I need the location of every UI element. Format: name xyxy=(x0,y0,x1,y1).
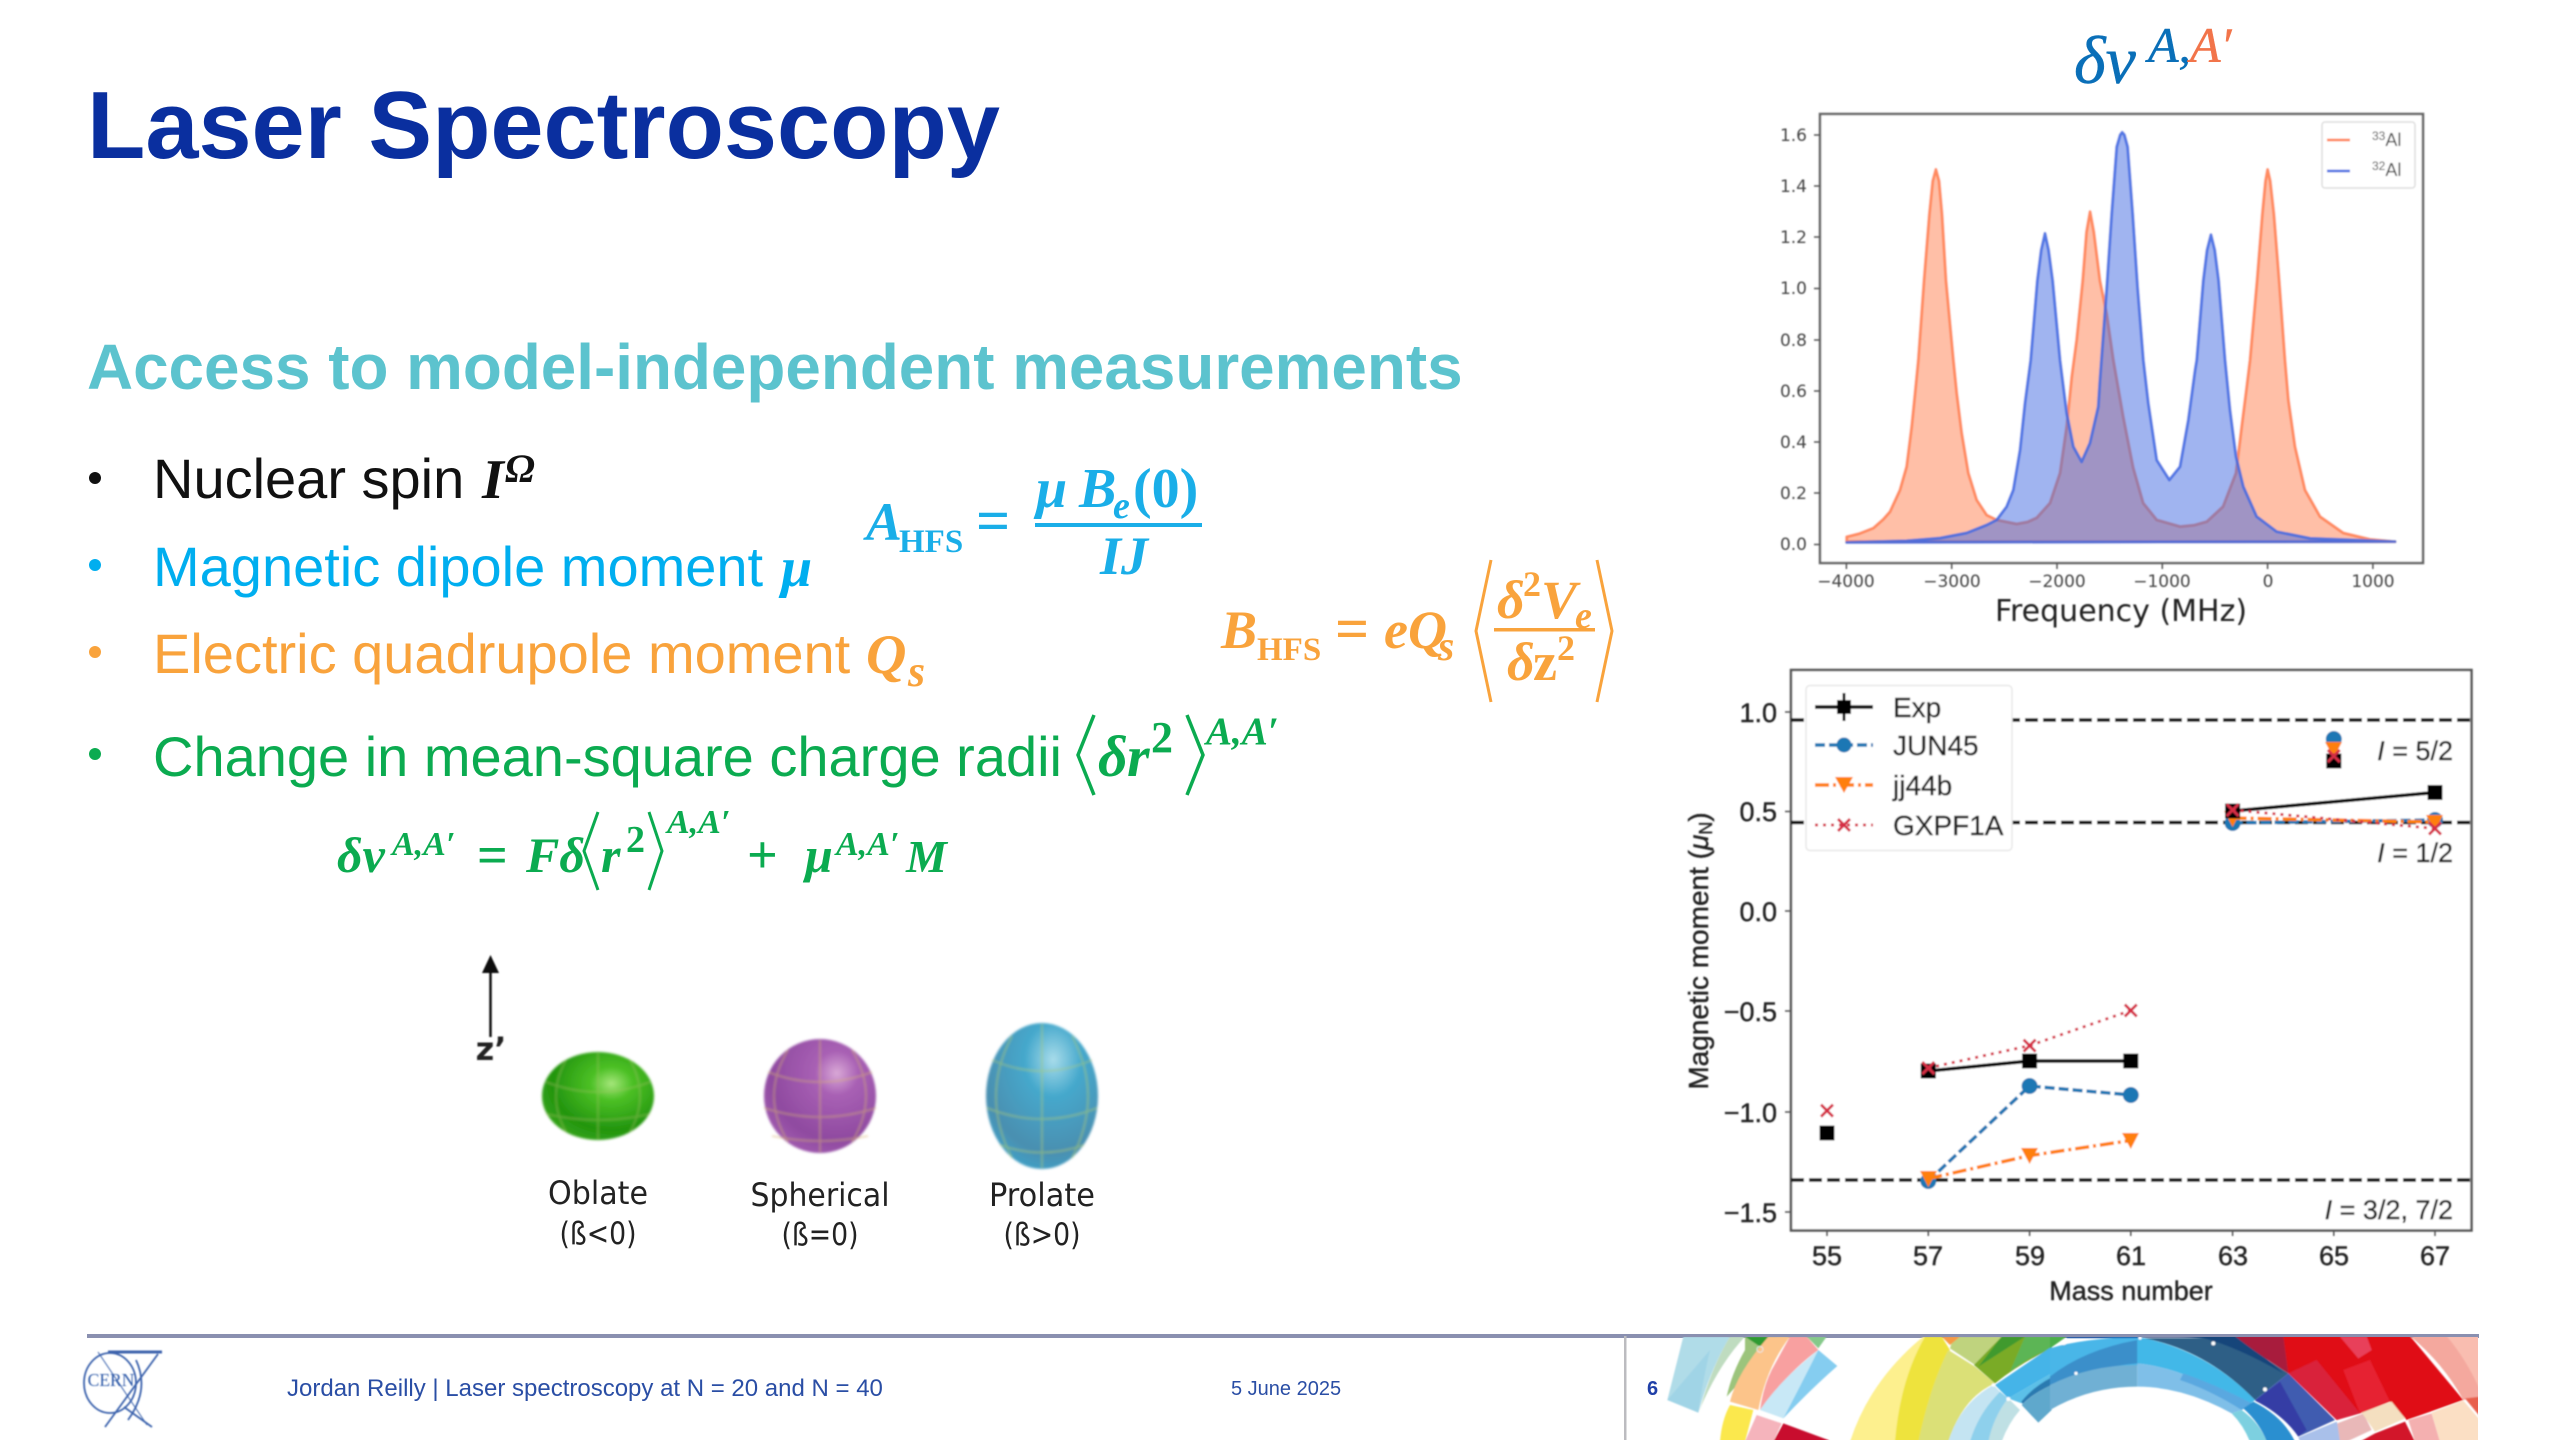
y axis labels: 0.5 xyxy=(1739,797,1777,827)
equation: A hyperfine: IJ xyxy=(1099,526,1150,586)
equation: A hyperfine: (0) xyxy=(1133,458,1198,520)
equation: A hyperfine: B xyxy=(1078,458,1116,520)
chart legend xyxy=(2322,122,2415,188)
label: prolate xyxy=(989,1176,1095,1253)
label: oblate xyxy=(548,1174,648,1252)
equation: A hyperfine: μ xyxy=(1033,458,1067,520)
icon: prolate nucleus xyxy=(986,1023,1098,1169)
y axis ticks: 0.4 xyxy=(1780,433,1807,453)
bullet: change in mean-square charge radii: A,A′ xyxy=(1203,710,1279,753)
legend: Exp xyxy=(1893,692,1941,723)
x axis ticks: −3000 xyxy=(1923,572,1981,592)
bullet: nuclear spin: Ω xyxy=(505,446,535,491)
y axis ticks xyxy=(1780,126,1820,555)
label: oblate: (ß<0) xyxy=(560,1216,636,1252)
bullet: magnetic dipole moment: μ xyxy=(778,537,812,599)
bullet: nuclear spin: I xyxy=(481,449,506,511)
equation: B hyperfine: eQ xyxy=(1384,600,1447,660)
y axis labels: 0.0 xyxy=(1739,897,1777,927)
x axis labels: 55 xyxy=(1812,1241,1842,1271)
bullet: magnetic dipole moment: Magnetic dipole moment xyxy=(153,535,764,598)
label: spherical xyxy=(750,1176,890,1253)
x axis labels: 57 xyxy=(1913,1241,1943,1271)
label: spherical: Spherical xyxy=(750,1176,890,1214)
chart legend: 32 xyxy=(2372,159,2386,173)
equation: isotope shift: μ xyxy=(802,827,833,883)
arrow: z' axis: z’ xyxy=(476,1030,506,1068)
heading: isotope shift symbol: A, xyxy=(2145,17,2191,73)
equation: isotope shift: δv xyxy=(337,827,386,883)
x axis ticks: 0 xyxy=(2263,572,2273,592)
equation: B hyperfine: HFS xyxy=(1257,632,1321,668)
equation: A hyperfine: A xyxy=(863,492,902,552)
x axis title: Mass number xyxy=(2049,1276,2213,1306)
y axis ticks: 1.2 xyxy=(1780,228,1807,248)
bullet: electric quadrupole moment: Electric quadrupole moment xyxy=(153,622,851,685)
x axis ticks: −2000 xyxy=(2028,572,2086,592)
footer: presenter and talk: Jordan Reilly | Laser spectroscopy at N = 20 and N = 40 xyxy=(287,1375,883,1402)
x axis labels: 63 xyxy=(2218,1241,2248,1271)
spin labels xyxy=(2325,736,2453,1225)
bullet: change in mean-square charge radii: 2 xyxy=(1151,713,1173,762)
y axis labels: 1.0 xyxy=(1739,698,1777,728)
x axis labels: 67 xyxy=(2420,1241,2450,1271)
x axis title: Frequency (MHz) xyxy=(1995,594,2247,629)
bullet: change in mean-square charge radii: r xyxy=(1127,724,1150,789)
y axis labels: −1.5 xyxy=(1724,1198,1777,1228)
equation: isotope shift: A,A′ xyxy=(665,804,730,841)
equation: A hyperfine: = xyxy=(976,488,1010,554)
spin labels: I = 3/2, 7/2 xyxy=(2325,1195,2453,1225)
bullet: electric quadrupole moment: Q xyxy=(866,624,906,686)
footer rule xyxy=(87,1334,2479,1440)
equation: B hyperfine: 2 xyxy=(1523,564,1541,604)
x axis labels xyxy=(1812,1230,2450,1271)
label: spherical: (ß=0) xyxy=(782,1217,858,1253)
equation: B hyperfine: s xyxy=(1437,624,1454,670)
label: prolate: Prolate xyxy=(989,1176,1095,1214)
equation: isotope shift: M xyxy=(905,831,949,882)
bullet: nuclear spin: Nuclear spin xyxy=(153,447,464,510)
series: 33Al orange xyxy=(1847,169,2395,542)
y axis ticks: 1.6 xyxy=(1780,126,1807,146)
x axis ticks: −1000 xyxy=(2133,572,2191,592)
y axis ticks: 1.4 xyxy=(1780,177,1807,197)
equation: isotope shift: Fδ xyxy=(525,827,585,883)
equation: B hyperfine xyxy=(1220,560,1612,702)
x axis labels: 61 xyxy=(2116,1241,2146,1271)
decorative footer graphic xyxy=(1667,1333,2480,1440)
heading: isotope shift symbol: δv xyxy=(2074,22,2137,98)
equation: isotope shift: + xyxy=(747,825,778,885)
x axis labels: 65 xyxy=(2319,1241,2349,1271)
equation: isotope shift: A,A′ xyxy=(390,826,455,863)
arrow: z' axis xyxy=(476,955,506,1068)
spin labels: I = 1/2 xyxy=(2377,838,2453,868)
equation: B hyperfine: B xyxy=(1220,600,1257,660)
spin labels: I = 5/2 xyxy=(2377,736,2453,766)
bullet: change in mean-square charge radii: δ xyxy=(1098,724,1128,789)
y axis labels xyxy=(1724,698,1791,1228)
icon: CERN logo: CERN xyxy=(88,1370,135,1390)
equation: isotope shift: r xyxy=(601,827,621,883)
y axis ticks: 0.0 xyxy=(1780,535,1807,555)
equation: B hyperfine: e xyxy=(1575,595,1592,637)
title: Laser Spectroscopy xyxy=(87,73,1000,179)
x axis ticks: −4000 xyxy=(1817,572,1875,592)
equation: B hyperfine: 2 xyxy=(1557,628,1575,668)
x axis labels: 59 xyxy=(2015,1241,2045,1271)
equation: B hyperfine: δ xyxy=(1507,632,1535,692)
chart: magnetic moment vs mass number xyxy=(1683,670,2472,1306)
y axis ticks: 0.8 xyxy=(1780,331,1807,351)
x axis ticks: 1000 xyxy=(2351,572,2395,592)
y axis labels: −0.5 xyxy=(1724,997,1777,1027)
bullet: electric quadrupole moment: s xyxy=(907,647,925,696)
section heading: Access to model-independent measurements xyxy=(87,331,1463,403)
y axis title: N xyxy=(1696,822,1716,835)
bullet: nuclear spin xyxy=(89,446,535,511)
legend: jj44b xyxy=(1892,770,1952,801)
legend: JUN45 xyxy=(1893,730,1979,761)
equation: isotope shift: = xyxy=(477,825,508,885)
series: GXPF1A xyxy=(1821,750,2441,1117)
equation: A hyperfine xyxy=(863,458,1202,586)
equation: B hyperfine: = xyxy=(1335,596,1369,662)
equation: B hyperfine: z xyxy=(1533,632,1557,692)
heading: isotope shift symbol xyxy=(2074,17,2233,98)
footer: page number: 6 xyxy=(1647,1378,1658,1400)
equation: A hyperfine: e xyxy=(1113,485,1130,527)
y axis labels: −1.0 xyxy=(1724,1098,1777,1128)
label: oblate: Oblate xyxy=(548,1174,648,1212)
footer: date: 5 June 2025 xyxy=(1231,1378,1341,1400)
equation: B hyperfine: δ xyxy=(1497,570,1525,630)
chart: hyperfine spectrum xyxy=(1780,114,2423,629)
equation: B hyperfine: V xyxy=(1541,570,1581,630)
x axis ticks xyxy=(1817,563,2395,592)
y axis title: Magnetic moment (μ xyxy=(1683,835,1714,1090)
series: jj44b xyxy=(1920,742,2443,1187)
series: JUN45 xyxy=(1921,732,2442,1188)
legend: GXPF1A xyxy=(1893,810,2004,841)
equation: isotope shift: A,A′ xyxy=(834,826,899,863)
y axis title: ) xyxy=(1683,812,1714,822)
y axis ticks: 0.6 xyxy=(1780,382,1807,402)
series: Exp xyxy=(1820,754,2442,1140)
spin reference lines xyxy=(1791,720,2471,1180)
legend xyxy=(1806,686,2012,850)
icon: oblate nucleus xyxy=(542,1052,654,1140)
equation: A hyperfine: HFS xyxy=(899,524,963,560)
chart legend: Al xyxy=(2385,160,2401,180)
y axis ticks: 1.0 xyxy=(1780,279,1807,299)
chart legend: 33 xyxy=(2372,129,2386,143)
series: 32Al blue xyxy=(1847,132,2395,542)
chart legend: Al xyxy=(2385,130,2401,150)
bullet: change in mean-square charge radii: Change in mean-square charge radii xyxy=(153,725,1062,788)
heading: isotope shift symbol: A′ xyxy=(2187,17,2233,73)
label: prolate: (ß>0) xyxy=(1004,1217,1080,1253)
icon: CERN logo xyxy=(84,1352,162,1427)
equation: isotope shift xyxy=(337,804,949,890)
y axis ticks: 0.2 xyxy=(1780,484,1807,504)
icon: spherical nucleus xyxy=(764,1039,876,1153)
equation: isotope shift: 2 xyxy=(626,819,645,861)
bullet: change in mean-square charge radii xyxy=(89,710,1279,795)
